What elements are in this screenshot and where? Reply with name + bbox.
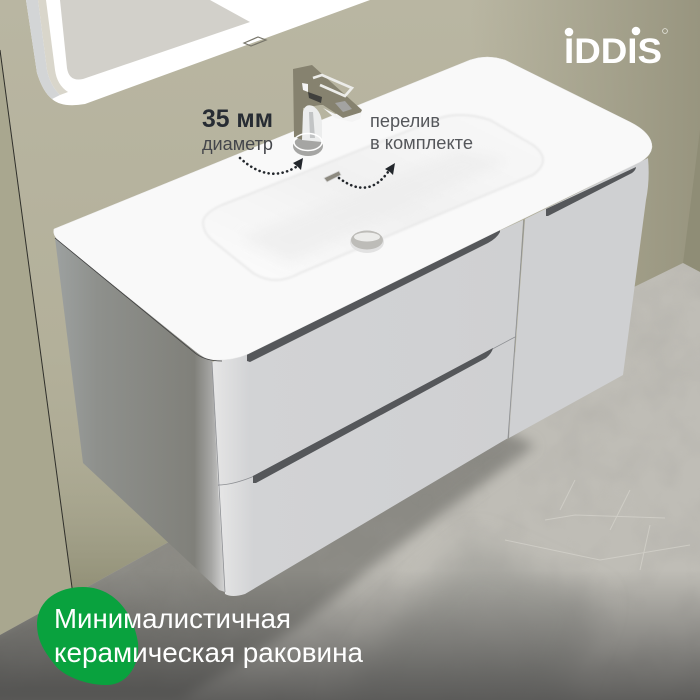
lever chrome bbox=[335, 101, 352, 112]
overflow label line 2: в комплекте bbox=[370, 133, 473, 153]
green blob bbox=[37, 587, 138, 685]
spout underside bbox=[323, 108, 362, 122]
faucet bbox=[293, 65, 362, 156]
overflow label line 1: перелив bbox=[370, 111, 440, 131]
right door bbox=[509, 158, 649, 438]
mirror bbox=[26, 0, 370, 105]
ceramic countertop sink bbox=[54, 57, 652, 361]
counter rim shadow bbox=[55, 238, 222, 361]
door handle bbox=[546, 167, 636, 216]
diameter ring bbox=[294, 134, 322, 150]
lower drawer bbox=[218, 337, 515, 596]
basin bbox=[203, 115, 543, 280]
callout value: 35 мм bbox=[202, 105, 273, 133]
callout: 35 mm diameter bbox=[202, 105, 273, 154]
callout: overflow included bbox=[370, 111, 473, 153]
mirror frame bbox=[26, 0, 370, 105]
handle loop bbox=[313, 75, 352, 96]
countertop bbox=[54, 57, 652, 360]
mirror glass reflection bbox=[60, 0, 250, 80]
floor bbox=[0, 250, 700, 700]
basin floor shading bbox=[240, 150, 510, 262]
caption line 1: Минималистичная bbox=[54, 603, 291, 634]
cabinet seams bbox=[212, 220, 524, 592]
faucet body bbox=[293, 65, 362, 140]
cabinet side panel bbox=[55, 238, 225, 592]
drain bbox=[350, 230, 384, 253]
caption line 2: керамическая раковина bbox=[54, 637, 364, 668]
logo: iddis: IDDIS bbox=[564, 32, 662, 71]
overflow bbox=[324, 171, 341, 182]
upper drawer bbox=[212, 220, 523, 485]
arrow: from overflow bbox=[339, 163, 395, 188]
arrow: to faucet hole bbox=[240, 158, 303, 174]
lower drawer handle bbox=[253, 348, 493, 483]
vanity cabinet bbox=[55, 158, 649, 596]
cabinet backing bbox=[212, 220, 523, 592]
caption bbox=[54, 603, 364, 668]
mirror clip bbox=[244, 37, 266, 46]
upper drawer handle bbox=[247, 228, 500, 362]
callout label: диаметр bbox=[202, 134, 273, 154]
faucet lit column bbox=[302, 105, 322, 142]
